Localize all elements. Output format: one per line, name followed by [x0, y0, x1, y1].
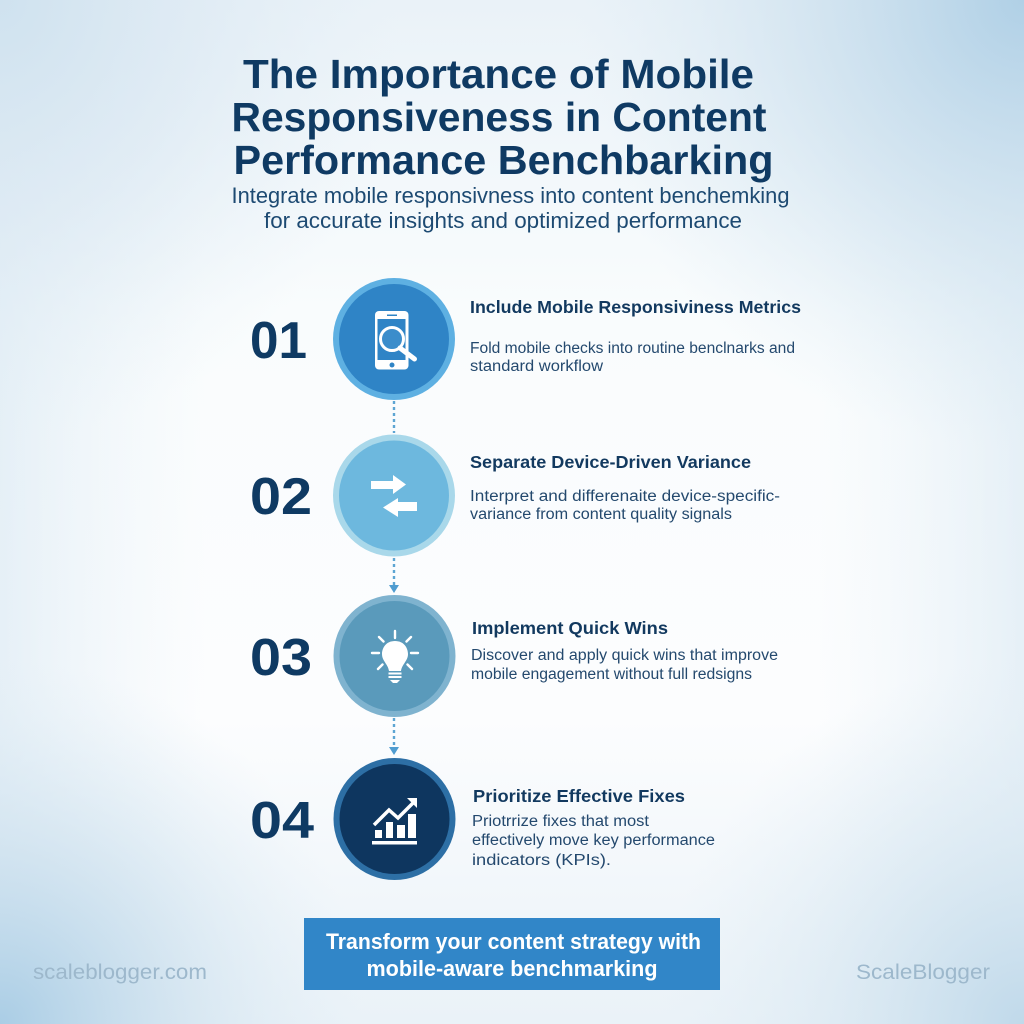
circle 02 [333, 434, 455, 556]
step 04 description: indicators (KPIs). [472, 852, 611, 869]
step 02 description [470, 488, 780, 523]
icon: rising chart [372, 798, 417, 844]
connector arrow: 03 to 04 [389, 718, 399, 755]
step number 03: 03 [250, 629, 312, 687]
title: Performance Benchbarking [234, 137, 774, 183]
step 03 heading: Implement Quick Wins [472, 618, 668, 638]
subtitle: Integrate mobile responsivness into content benchemking [232, 183, 790, 208]
step 01 description: standard workflow [470, 358, 604, 375]
title [232, 51, 774, 183]
step 01 heading: Include Mobile Responsiviness Metrics [470, 297, 801, 317]
step 04 description: Priotrrize fixes that most [472, 813, 650, 830]
title: Responsiveness in Content [232, 94, 767, 140]
step 04 [250, 758, 715, 880]
step 03 [250, 595, 778, 717]
footer: ScaleBlogger: ScaleBlogger [856, 961, 990, 984]
connector arrow: 02 to 03 [389, 558, 399, 593]
subtitle: for accurate insights and optimized performance [264, 208, 742, 233]
subtitle [232, 183, 790, 233]
step 01 [250, 278, 801, 400]
circle 01 [333, 278, 455, 400]
step 02 description: variance from content quality signals [470, 506, 732, 523]
step 02 heading: Separate Device-Driven Variance [470, 452, 751, 472]
circle 04 [334, 758, 456, 880]
step number 01: 01 [250, 312, 307, 370]
call to action banner [304, 918, 720, 990]
step 03 description [471, 647, 778, 683]
call to action banner: Transform your content strategy with [326, 929, 701, 954]
circle 03 [334, 595, 456, 717]
footer: scaleblogger.com: scaleblogger.com [33, 961, 207, 984]
icon: phone with magnifier [375, 311, 414, 370]
icon: swap arrows [371, 475, 417, 517]
step 02 [250, 434, 780, 556]
call to action banner: mobile-aware benchmarking [366, 956, 658, 981]
step 03 description: mobile engagement without full redsigns [471, 666, 752, 683]
title: The Importance of Mobile [243, 51, 754, 97]
step 01 description: Fold mobile checks into routine benclnarks and [470, 340, 795, 357]
step 04 heading: Prioritize Effective Fixes [473, 786, 685, 806]
step number 04: 04 [250, 792, 314, 850]
connector: 01 to 02 [393, 401, 395, 433]
step 02 description: Interpret and differenaite device-specific- [470, 488, 780, 505]
step 04 description [472, 813, 715, 869]
step 01 description [470, 340, 795, 375]
step 03 description: Discover and apply quick wins that improve [471, 647, 778, 664]
step 04 description: effectively move key performance [472, 832, 715, 849]
icon: light bulb [372, 631, 418, 683]
step number 02: 02 [250, 468, 312, 526]
